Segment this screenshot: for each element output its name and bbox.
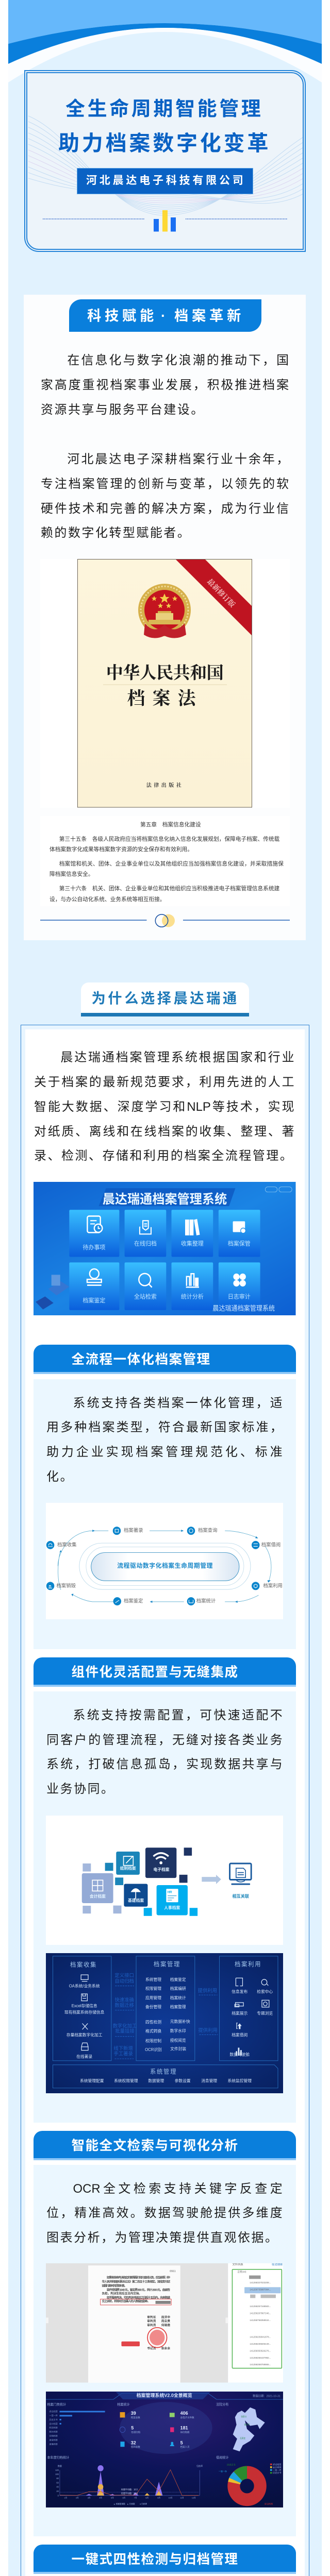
text: full text search: 位，精准高效。数据驾驶舱提供多维度 — [46, 2206, 283, 2220]
diagram: process cycle: 档案鉴定 — [124, 1598, 143, 1604]
diagram: system architecture: 档案利用 — [235, 1960, 261, 1968]
screenshot: data dashboard: 12月 — [192, 2496, 196, 2499]
screenshot: data dashboard: 总电子文件数 — [180, 2415, 194, 2419]
text: components: 同客户的管理流程，无缝对接各类业务 — [46, 1733, 283, 1747]
diagram: system architecture: 档案整理 — [170, 2004, 186, 2009]
screenshot: data dashboard: 本年度归档统计 — [47, 2455, 69, 2460]
screenshot: data dashboard: 档案管理系统V2.0全景概览 — [136, 2392, 192, 2398]
diagram: system architecture: 系统管理配置 — [80, 2078, 104, 2083]
screenshot: data dashboard: 录音档案 — [49, 2438, 58, 2441]
screenshot: data dashboard: 0 — [58, 2494, 59, 2497]
diagram: archive types: HR — [168, 1890, 172, 1894]
diagram: process cycle: 档案借阅 — [261, 1541, 280, 1548]
text: full process: 系统支持各类档案一体化管理，适 — [73, 1396, 283, 1410]
header arcs — [8, 0, 322, 82]
screenshot: data dashboard: 会计档案 — [273, 2465, 281, 2468]
screenshot: data dashboard: 4月 — [99, 2496, 102, 2499]
subpanel: full process — [34, 1379, 296, 1649]
screenshot: data dashboard: 406 — [180, 2410, 188, 2416]
screenshot: data dashboard: 10月 — [169, 2496, 173, 2499]
diagram: system architecture: 消息管理 — [201, 2078, 217, 2083]
diagram: system architecture: 快速准确 — [114, 1997, 134, 2003]
divider with circles — [40, 914, 290, 927]
screenshot: data dashboard: 9月 — [157, 2496, 160, 2499]
screenshot: document OCR viewer: 141258235506449... — [250, 2343, 271, 2345]
intro paragraph 2: 河北晨达电子深耕档案行业十余年， — [67, 452, 289, 466]
heading bar: four-property check — [34, 2544, 296, 2574]
diagram: process cycle — [46, 1503, 283, 1619]
overview text: 对纸质、离线和在线档案的收集、整理、著 — [34, 1125, 294, 1139]
text: full process: 化。 — [46, 1470, 74, 1484]
screenshot: document OCR viewer: 141258239041878... — [250, 2335, 271, 2338]
screenshot: data dashboard: 5 — [180, 2440, 183, 2445]
diagram: system architecture: 档案管理 — [154, 1960, 180, 1968]
text: full text search: OCR全文检索支持关键字反查定 — [73, 2181, 283, 2196]
screenshot: document OCR viewer: 审 判 长 周 洪 中 — [147, 2315, 170, 2319]
law excerpt: 设，与办公自动化系统、业务系统等相互衔接。 — [50, 896, 165, 903]
screenshot: document OCR viewer: 如不服本判决，可在判决书送达之日起十五日内，向本院递 — [107, 2295, 170, 2300]
intro paragraph 2 — [41, 452, 289, 540]
text: components: 业务协同。 — [46, 1782, 115, 1796]
tab heading: 科技赋能 — [87, 308, 157, 324]
screenshot: data dashboard: 档案统计 — [117, 2402, 130, 2406]
overview text: 关于档案的最新规范要求，利用先进的人工 — [34, 1075, 294, 1089]
book cover: archives law: 法律出版社 — [146, 782, 184, 788]
diagram: system architecture: 批量挂接 — [115, 2028, 135, 2035]
screenshot: data dashboard: 3月 — [88, 2496, 91, 2499]
diagram: archive types: 纸制档案 — [120, 1866, 136, 1871]
intro paragraph 1: 家高度重视档案事业发展，积极推进档案 — [41, 378, 289, 392]
diagram: system architecture: 手工著录 — [113, 2051, 133, 2057]
diagram: system architecture: 提供利用 — [197, 1988, 217, 1994]
heading bar: four-property check: 一键式四性检测与归档管理 — [71, 2552, 238, 2567]
screenshot: data dashboard: 60 — [56, 2481, 59, 2484]
overview text — [34, 1050, 294, 1163]
screenshot: document OCR viewer: 审 判 员 何 晓 霞 — [147, 2323, 170, 2327]
screenshot: document OCR viewer: 141258327023208... — [250, 2281, 271, 2284]
screenshot: data dashboard: 历史文书 — [49, 2418, 58, 2421]
screenshot: document OCR viewer — [46, 2263, 283, 2383]
screenshot: data dashboard: 120 — [55, 2468, 59, 2471]
screenshot: document OCR viewer: 141258257168583... — [250, 2305, 271, 2308]
law excerpt: 体档案数字化成果等档案数字资源的安全保存和有效利用。 — [50, 846, 193, 853]
law excerpt: 第三十五条 各级人民政府应当将档案信息化纳入信息化发展规划，保障电子档案、传统载 — [59, 836, 279, 842]
heading: why choose — [81, 982, 249, 1016]
screenshot: system home — [34, 1182, 296, 1315]
diagram: process cycle: 档案查询 — [198, 1527, 217, 1533]
screenshot: document OCR viewer: 141258258759865... — [250, 2363, 271, 2366]
subpanel: components — [34, 1691, 296, 2123]
screenshot: data dashboard: 保定市 — [244, 2423, 250, 2426]
screenshot: document OCR viewer: 书 记 员 张 余 余 — [147, 2346, 170, 2350]
screenshot: document OCR viewer: 审 判 员 周 云 贵 — [147, 2319, 170, 2323]
diagram: system architecture: OA系统/业务系统 — [69, 1984, 100, 1989]
law excerpt: 第五章 档案信息化建设 — [140, 822, 201, 828]
screenshot: data dashboard: 照片档案 — [49, 2430, 58, 2433]
screenshot: document OCR viewer: 文件列表 — [232, 2263, 243, 2266]
screenshot: data dashboard: 一案一件 — [219, 2469, 227, 2472]
screenshot: data dashboard: 会计档案 — [49, 2421, 58, 2425]
heading bar: full process — [34, 1345, 296, 1374]
diagram: system architecture: 系统权限管理 — [114, 2078, 138, 2083]
screenshot: data dashboard: 一案一件 — [49, 2414, 58, 2417]
diagram: process cycle: 档案销毁 — [56, 1582, 76, 1588]
screenshot: data dashboard: 待归档数 — [180, 2430, 190, 2434]
text: components — [46, 1708, 283, 1796]
diagram: system architecture: 数据迁移 — [114, 2002, 134, 2009]
panel: technology empowerment — [24, 295, 306, 940]
book cover: archives law — [77, 559, 252, 808]
dotted rule and bars icon — [43, 210, 287, 232]
screenshot: data dashboard: 归档率 — [196, 2464, 203, 2467]
screenshot: document OCR viewer: 交上诉状，并按对方当事人的人数提出副本。 — [102, 2299, 150, 2303]
screenshot: data dashboard: 录像档案 — [49, 2442, 58, 2445]
screenshot: data dashboard: 月度平均值：18.5 — [121, 2487, 138, 2490]
diagram: system architecture: 备份管理 — [145, 2004, 161, 2009]
white inner — [25, 1029, 304, 2576]
subpanel: full text search — [34, 2165, 296, 2536]
heading bar: full text search — [34, 2131, 296, 2160]
diagram: system architecture: 系统监控管理 — [227, 2078, 252, 2083]
screenshot: system home: 档案鉴定 — [82, 1296, 105, 1303]
diagram: archive types: 相互关联 — [232, 1893, 250, 1899]
diagram: system architecture: 系统管理 — [150, 2068, 177, 2075]
screenshot: document OCR viewer: 负担，判决生效后五日内交纳。 — [102, 2291, 142, 2296]
intro paragraph 2: 硬件技术和完善的解决方案，成为行业信 — [41, 502, 289, 516]
screenshot: data dashboard: 张家口 — [241, 2415, 247, 2417]
diagram: system architecture: 自动归档 — [114, 1978, 134, 1984]
diagram: process cycle: 档案著录 — [124, 1527, 143, 1533]
diagram: archive types: 电子档案 — [153, 1867, 169, 1872]
diagram: system architecture: 线下新增 — [113, 2045, 133, 2052]
diagram: system architecture: 数据驾驶舱 — [229, 2052, 250, 2057]
screenshot: system home: 收集整理 — [181, 1240, 204, 1247]
screenshot: data dashboard: 一案一件 — [273, 2468, 281, 2471]
diagram: process cycle: 档案收集 — [57, 1541, 77, 1548]
screenshot: document OCR viewer: 141258266437982... — [250, 2357, 271, 2359]
screenshot: data dashboard: 8月 — [145, 2496, 148, 2499]
screenshot: data dashboard: 借阅总数 — [131, 2445, 140, 2449]
screenshot: data dashboard: 诉讼档案 — [273, 2462, 281, 2465]
screenshot: data dashboard: 20 — [56, 2489, 59, 2492]
diagram: system architecture: 定义接口 — [114, 1972, 134, 1978]
screenshot: data dashboard: 科技档案 — [49, 2426, 58, 2429]
screenshot: data dashboard: 2月 — [76, 2496, 79, 2499]
diagram: archive types — [46, 1816, 283, 1945]
text: full process — [46, 1396, 283, 1484]
screenshot: data dashboard: ▲ 档案管理数 — [113, 2502, 125, 2505]
text: full process: 用多种档案类型，符合最新国家标准， — [46, 1420, 283, 1434]
diagram: system architecture: 数字化加工 — [112, 2023, 137, 2029]
diagram: system architecture — [46, 1953, 283, 2093]
text: full text search: 图表分析，为管理决策提供直观依据。 — [46, 2231, 278, 2245]
diagram: system architecture: 应用管理 — [145, 1995, 161, 2000]
diagram: archive types: 人事档案 — [164, 1905, 180, 1910]
screenshot: system home: 在线归档 — [134, 1240, 157, 1247]
diagram: system architecture: Excel存储信息 — [72, 2003, 97, 2008]
diagram: system architecture: 档案编研 — [170, 1986, 186, 1991]
screenshot: data dashboard: 1月 — [64, 2496, 67, 2499]
diagram: system architecture: 存量档案数字化加工 — [67, 2032, 102, 2038]
intro paragraph 1: 资源共享与服务平台建设。 — [41, 403, 205, 417]
intro paragraph 1: 在信息化与数字化浪潮的推动下，国 — [67, 353, 289, 367]
screenshot: data dashboard: 数量 — [58, 2464, 62, 2467]
diagram: system architecture: 信息发布 — [232, 1989, 248, 1994]
diagram: system architecture: 系统管理 — [145, 1977, 161, 1982]
diagram: system architecture: 格式转换 — [145, 2028, 161, 2033]
overview text: 录、检测、存储和利用的档案全流程管理。 — [34, 1149, 293, 1163]
screenshot: system home: 统计分析 — [181, 1293, 204, 1300]
screenshot: document OCR viewer: 0911 — [170, 2270, 176, 2273]
screenshot: data dashboard: 诉讼档案 — [49, 2410, 58, 2413]
screenshot: system home: 日志审计 — [228, 1293, 251, 1300]
tab heading — [69, 299, 261, 332]
book cover: archives law: 档案法 — [127, 688, 203, 709]
law excerpt: 档案馆和机关、团体、企业事业单位以及其他组织应当加强档案信息化建设，并采取措施保 — [59, 861, 284, 867]
law excerpt: 障档案信息安全。 — [50, 871, 94, 877]
screenshot: document OCR viewer: 正卷(10) — [238, 2270, 246, 2273]
screenshot: data dashboard: 80 — [56, 2477, 59, 2480]
screenshot: data dashboard: 诉讼档案 — [265, 2502, 273, 2505]
screenshot: data dashboard: 档案总数 — [131, 2415, 140, 2419]
diagram: process cycle: 流程驱动数字化档案生命周期管理 — [117, 1561, 212, 1569]
diagram: archive types: 基建档案 — [128, 1897, 144, 1903]
screenshot: document OCR viewer: 华人民共和国民事诉讼法》第二百五十三条规定，加倍支付迟 — [102, 2279, 170, 2283]
book cover: archives law: 最新修订版 — [205, 577, 237, 609]
screenshot: data dashboard: 100 — [55, 2473, 59, 2476]
diagram: process cycle: 档案利用 — [263, 1582, 283, 1588]
screenshot: data dashboard: 月度平均值：20.5 — [121, 2491, 138, 2494]
screenshot: data dashboard: 32 — [131, 2440, 136, 2445]
screenshot: data dashboard: 7月 — [134, 2496, 137, 2499]
screenshot: data dashboard: 6月 — [122, 2496, 125, 2499]
title line 2: 助力档案数字化变革 — [58, 131, 271, 155]
text: full process: 助力企业实现档案管理规范化、标准 — [46, 1445, 283, 1459]
intro paragraph 2: 赖的数字化转型赋能者。 — [41, 526, 191, 540]
screenshot: system home: 全站检索 — [134, 1293, 157, 1300]
screenshot: document OCR viewer: 延履行期间的债务利息。 — [102, 2283, 127, 2287]
tab heading: · — [161, 308, 166, 324]
screenshot: system home: 档案保管 — [228, 1240, 251, 1247]
screenshot: system home: 晨达瑞通档案管理系统 — [212, 1304, 275, 1312]
diagram: system architecture: 检索中心 — [257, 1989, 273, 1994]
screenshot: data dashboard: 39 — [131, 2410, 136, 2416]
screenshot: document OCR viewer: 141258735887084... — [250, 2288, 271, 2291]
diagram: process cycle: 档案统计 — [196, 1598, 216, 1604]
screenshot: data dashboard — [46, 2392, 283, 2507]
text: components: 系统，打破信息孤岛，实现数据共享与 — [46, 1757, 283, 1771]
diagram: system architecture: 在线著录 — [76, 2054, 92, 2059]
diagram: system architecture: 文件封装 — [170, 2046, 186, 2052]
diagram: archive types: 会计档案 — [90, 1893, 106, 1899]
screenshot: document OCR viewer: 取消搜索 — [272, 2263, 283, 2266]
diagram: system architecture: 档案鉴定 — [170, 1977, 186, 1982]
heading bar: full process: 全流程一体化档案管理 — [71, 1352, 210, 1367]
text: components: 系统支持按需配置，可快速适配不 — [73, 1708, 283, 1722]
heading bar: components — [34, 1657, 296, 1687]
screenshot: data dashboard: 5 — [131, 2425, 134, 2430]
screenshot: data dashboard: 181 — [180, 2425, 188, 2430]
intro paragraph 1 — [41, 353, 289, 417]
wave decoration — [28, 115, 303, 215]
overview text: 晨达瑞通档案管理系统根据国家和行业 — [60, 1050, 294, 1064]
screenshot: data dashboard: 11月 — [180, 2496, 184, 2499]
diagram: system architecture: OCR识别 — [145, 2047, 162, 2052]
diagram: system architecture: 专题浏览 — [257, 2011, 273, 2016]
screenshot: data dashboard: 法院分布 — [216, 2402, 228, 2406]
screenshot: data dashboard: 历史文书 — [227, 2463, 235, 2466]
overview text: 智能大数据、深度学习和NLP等技术，实现 — [34, 1100, 294, 1114]
diagram: system architecture: 权限控制 — [145, 2038, 161, 2043]
diagram: system architecture: 档案统计 — [170, 1995, 186, 2000]
diagram: system architecture: 四性检测 — [145, 2019, 161, 2025]
title frame — [24, 70, 306, 252]
screenshot: data dashboard: 石家庄 — [240, 2436, 246, 2439]
diagram: system architecture: 数据管理 — [148, 2078, 164, 2083]
diagram: system architecture: 权限管理 — [145, 1986, 161, 1991]
screenshot: data dashboard: ● 归档率 — [140, 2502, 147, 2505]
title line 1: 全生命周期智能管理 — [65, 98, 263, 120]
diagram: system architecture: 元数据补快 — [170, 2019, 190, 2024]
diagram: system architecture: 现有档案系统存储信息 — [64, 2009, 104, 2015]
diagram: system architecture: 数字水印 — [170, 2028, 186, 2033]
screenshot: data dashboard: 历史文书 — [273, 2471, 281, 2474]
screenshot: data dashboard: 5月 — [111, 2496, 114, 2499]
diagram: system architecture: 参数设置 — [175, 2078, 191, 2083]
heading: why choose: 为什么选择晨达瑞通 — [92, 990, 239, 1006]
heading bar: components: 组件化灵活配置与无缝集成 — [71, 1665, 238, 1680]
inner frame line — [26, 72, 304, 250]
diagram: system architecture: 档案收集 — [70, 1961, 97, 1969]
screenshot: data dashboard: 档案门类统计 — [47, 2402, 66, 2406]
screenshot: document OCR viewer: 141258353526276... — [250, 2349, 271, 2352]
screenshot: data dashboard: 数据日期：2021-10-31 — [253, 2394, 280, 2398]
diagram: system architecture: 档案展示 — [232, 2011, 248, 2016]
law excerpt: 第三十六条 机关、团体、企业事业单位和其他组织应当积极推进电子档案管理信息系统建 — [59, 886, 279, 892]
screenshot: data dashboard: 实物档案 — [49, 2434, 58, 2437]
screenshot: data dashboard: 借阅统计 — [216, 2455, 228, 2460]
screenshot: system home: 晨达瑞通档案管理系统 — [103, 1192, 227, 1207]
intro paragraph 2: 专注档案管理的创新与变革，以领先的软 — [41, 477, 289, 491]
screenshot: document OCR viewer: 141258768358534... — [250, 2319, 271, 2321]
screenshot: data dashboard: 档案人次 — [180, 2445, 190, 2449]
screenshot: document OCR viewer: 如果未按本判决指定的期限履行给付金钱义务，应当依照《中 — [107, 2275, 170, 2279]
book cover: archives law: 中华人民共和国 — [106, 664, 223, 683]
screenshot: document OCR viewer: 案件受理费 1040 元，鉴定费 800 元，共计 2000 元，由被告 — [107, 2287, 170, 2292]
panel: product features — [21, 1025, 309, 2576]
company banner: 河北晨达电子科技有限公司 — [86, 175, 246, 187]
screenshot: data dashboard: 40 — [56, 2485, 59, 2488]
heading bar: full text search: 智能全文检索与可视化分析 — [71, 2138, 238, 2153]
screenshot: system home: 待办事项 — [82, 1243, 105, 1250]
text: full text search — [46, 2181, 283, 2245]
white image background — [40, 559, 290, 808]
diagram: system architecture: 档案借阅 — [232, 2032, 248, 2038]
company banner — [77, 168, 253, 194]
screenshot: data dashboard: 在线归档 — [131, 2430, 140, 2434]
diagram: system architecture: 授权阅览 — [170, 2038, 186, 2043]
tab heading: 档案革新 — [174, 308, 244, 324]
screenshot: document OCR viewer: 141258267867246... — [250, 2312, 271, 2315]
law excerpt — [40, 816, 290, 906]
screenshot: data dashboard: ▲ 归档数 — [127, 2502, 135, 2505]
diagram: system architecture: 提供利用 — [198, 2027, 218, 2033]
